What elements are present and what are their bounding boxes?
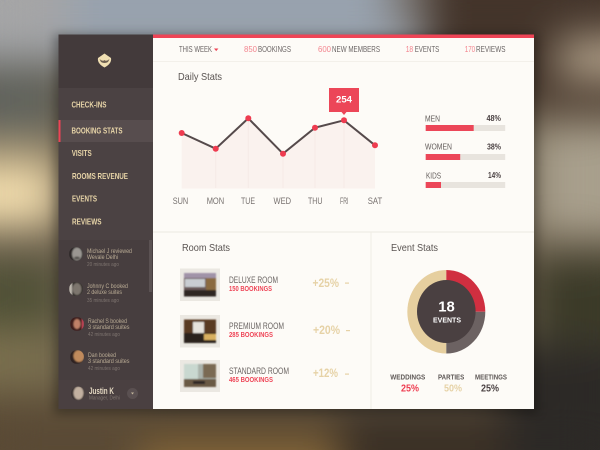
activity: Rachel S: 42 minutes ago <box>88 332 120 338</box>
day labels: SAT <box>368 196 383 206</box>
donut chart: event stats: 18 <box>438 300 455 316</box>
room: premium: 285 BOOKINGS <box>229 332 273 339</box>
day labels <box>173 196 383 206</box>
progress bar: men: MEN <box>425 114 440 124</box>
legend: parties <box>438 372 464 394</box>
day labels: TUE <box>241 196 255 206</box>
activity: Michael J: Wevale Delhi <box>87 254 118 261</box>
activity: Dan: 3 standard suites <box>88 358 130 365</box>
day labels: FRI <box>340 196 348 206</box>
heading: room stats: Room Stats <box>182 242 230 254</box>
user profile footer: Manager, Delhi <box>89 396 120 402</box>
activity: Dan: Dan booked <box>88 352 116 359</box>
donut chart: event stats <box>407 270 485 354</box>
legend: meetings <box>475 372 507 394</box>
progress bar: women <box>425 142 505 160</box>
day labels: MON <box>207 196 224 206</box>
tooltip: 254: 254 <box>336 94 353 106</box>
legend: parties: PARTIES <box>438 372 464 381</box>
main content panel <box>153 35 534 409</box>
legend: weddings: 25% <box>401 384 419 394</box>
nav: rooms revenue: ROOMS REVENUE <box>72 172 128 181</box>
legend: meetings: MEETINGS <box>475 372 507 381</box>
activity: Michael J: 20 minutes ago <box>87 262 119 268</box>
top stats bar: THIS WEEK <box>179 44 212 54</box>
day labels: WED <box>274 196 291 206</box>
top stats bar: NEW MEMBERS <box>332 44 380 54</box>
thumbnail: standard room <box>180 360 220 392</box>
room: deluxe: 150 BOOKINGS <box>229 286 272 293</box>
activity: Rachel S: 3 standard suites <box>88 324 130 331</box>
thumbnail: premium room <box>180 315 220 348</box>
active nav highlight <box>58 120 153 142</box>
room: deluxe: DELUXE ROOM <box>229 275 278 285</box>
room: standard: +12% <box>313 368 338 380</box>
progress bar: men <box>425 114 505 131</box>
activity: Johnny C: 2 deluxe suites <box>87 289 122 296</box>
room: premium: +20% <box>313 325 340 337</box>
day labels: SUN <box>173 196 188 206</box>
top stats bar: REVIEWS <box>476 44 506 54</box>
room: standard: 465 BOOKINGS <box>229 377 273 384</box>
top stats bar: 600 <box>318 44 331 54</box>
top red accent bar <box>153 34 534 38</box>
room: standard <box>180 360 349 392</box>
progress bar: kids: 14% <box>488 171 501 180</box>
activity: Johnny C: 35 minutes ago <box>87 298 119 304</box>
room: premium: PREMIUM ROOM <box>229 321 284 331</box>
user profile footer: Justin K <box>89 386 114 396</box>
scrollbar <box>149 240 152 292</box>
logo icon <box>98 54 111 68</box>
activity: Johnny C <box>69 282 128 304</box>
activity: Rachel S <box>70 317 130 338</box>
heading: event stats: Event Stats <box>391 242 438 254</box>
day labels: THU <box>308 196 322 206</box>
nav: events: EVENTS <box>72 195 97 204</box>
thumbnail: deluxe room <box>180 268 220 301</box>
legend: meetings: 25% <box>481 384 499 394</box>
progress bar: kids <box>426 171 505 188</box>
heading: daily stats: Daily Stats <box>178 71 222 83</box>
progress bar: women: WOMEN <box>425 142 452 152</box>
activity: Dan: 42 minutes ago <box>88 366 120 372</box>
sidebar <box>58 34 153 409</box>
top stats bar: 850 <box>244 44 257 54</box>
top stats bar <box>179 44 506 54</box>
user profile footer <box>71 386 138 402</box>
donut chart: event stats: EVENTS <box>433 318 461 325</box>
nav: check-ins: CHECK-INS <box>72 100 107 110</box>
legend: parties: 50% <box>444 384 462 394</box>
nav: booking stats: BOOKING STATS <box>72 126 123 136</box>
room: deluxe <box>180 268 349 301</box>
activity: Rachel S: Rachel S booked <box>88 318 127 325</box>
top stats bar: EVENTS <box>415 44 439 54</box>
legend: weddings: WEDDINGS <box>390 372 425 381</box>
activity: Johnny C: Johnny C booked <box>87 283 128 290</box>
room: premium <box>180 315 350 348</box>
activity: Dan <box>70 350 130 372</box>
room: standard: STANDARD ROOM <box>229 366 289 376</box>
nav: visits: VISITS <box>72 149 92 158</box>
room: deluxe: +25% <box>312 278 339 290</box>
tooltip: 254 <box>329 88 359 115</box>
panel shadow <box>54 34 538 414</box>
line chart: daily stats <box>173 88 383 206</box>
top stats bar: BOOKINGS <box>258 44 291 54</box>
nav: reviews: REVIEWS <box>72 218 102 226</box>
activity: Michael J: Michael J reviewed <box>87 248 132 255</box>
activity: Michael J <box>69 247 132 268</box>
progress bar: kids: KIDS <box>426 172 441 180</box>
top stats bar: 18 <box>406 44 413 54</box>
legend: weddings <box>390 372 425 394</box>
top stats bar: 170 <box>465 44 475 54</box>
progress bar: men: 48% <box>486 114 501 123</box>
progress bar: women: 38% <box>487 142 501 151</box>
